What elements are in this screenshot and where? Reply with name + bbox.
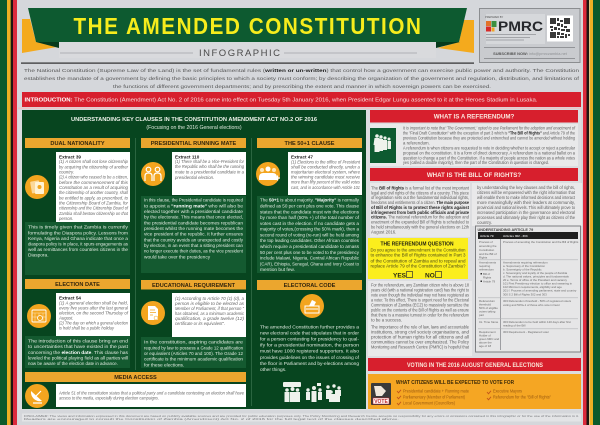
row: process: amending the — [479, 244, 497, 248]
panel heading: WHAT CITIZENS WILL BE EXPECTED TO VOTE FOR — [396, 380, 514, 386]
explanation: include Malawi, Nigeria, Central African Republic — [260, 256, 360, 262]
text: referendum voting: The importance of the rule of law, laws and accountable — [371, 324, 470, 330]
header: ELECTION DATE — [55, 282, 100, 288]
heading bar — [370, 110, 578, 122]
panel: what is a referendum — [370, 110, 578, 165]
icon: passport — [25, 175, 49, 199]
extract box: (2) A citizen who ceased to be a citizen, — [59, 175, 128, 180]
table header — [478, 232, 578, 239]
checklist: Executive Mayors — [493, 388, 522, 394]
table header: Article 79 — [480, 234, 494, 238]
panel: key clauses — [22, 110, 366, 409]
extract box — [56, 152, 130, 222]
logo panel: PMRC — [480, 8, 580, 62]
text column right: by understanding the key clauses and the bill of rights, — [477, 185, 575, 190]
explanation: to uncertainties that have existed in the past — [28, 344, 129, 350]
explanation: to appoint a "running mate" who will also be — [144, 203, 243, 209]
intro paragraph — [24, 68, 580, 90]
text column left: of legislation sets out the fundamental individual rights, — [371, 195, 469, 200]
explanation: (CAR), Ethiopia, Senegal, Ghana and Ivory Coast to — [260, 261, 359, 267]
right flag border — [583, 0, 600, 425]
introduction bar: INTRODUCTION: The Constitution (Amendment) Act No. 2 of 2016 came into effect on Tuesday 5th January 2016, when President Edgar Lungu assented to it at the Heroes Stadium in Lusaka. — [24, 98, 538, 104]
extract box: Zambia shall bestow citizenship on that — [58, 211, 129, 216]
icon: vote box — [371, 383, 391, 405]
explanation: required by law to possess a Grade 12 qualification — [144, 345, 243, 351]
clause: dual nationality — [25, 138, 130, 275]
clause: presidential running mate — [141, 138, 246, 273]
text column right: citizens will be empowered with the right information that — [477, 190, 576, 195]
row: threshold: 50% of eligible — [479, 306, 498, 310]
extract box: Extract 54 — [59, 296, 81, 300]
text: referendum voting: Commission of Zambia (ECZ) to massively sensitize the — [371, 302, 470, 308]
explanation: provides guidelines on the issues of crossing of — [260, 355, 360, 361]
row: threshold — [479, 299, 572, 317]
row: requirement: Holder of — [479, 334, 491, 338]
explanation: second round of voting (re-run) will be held among — [260, 232, 359, 238]
icon: ballot box — [300, 294, 324, 318]
text: referendum voting: For the referendum, any Zambian citizen who is above 18 — [371, 282, 470, 288]
extract box: the Republic who shall be the running — [175, 164, 245, 169]
text column right: more meaningfully with their leaders at community, — [477, 200, 575, 205]
table title: UNDERSTANDING ARTICLE 79 — [478, 228, 533, 232]
explanation: the floor in Parliament and by-elections among — [260, 361, 359, 367]
extract box: country. — [59, 170, 74, 174]
row: referendum amendments: requiring — [479, 264, 491, 268]
panel heading — [71, 117, 318, 131]
extract box: shall be conducted directly, under a — [291, 164, 361, 170]
extract box: certificate or its equivalent". — [175, 321, 225, 326]
extract box: (1) Elections to the office of President — [291, 160, 361, 164]
logo: PREPARED BY — [485, 15, 504, 19]
row: time frame: reading of the Bill — [503, 324, 526, 328]
intro paragraph: The National Constitution (Supreme Law of the Land) is the set of fundamental rules ( written or un-written ) that control how a government can exercise public power and authority. The Constitution — [24, 68, 579, 74]
explanation: for these elections. — [144, 362, 184, 368]
icon: document — [141, 301, 165, 325]
clause: the 50+1 clause — [256, 138, 362, 273]
definition text: yes (called a double majority), then the part of the Constitution in question is changed. — [403, 160, 549, 165]
extract box — [56, 384, 246, 407]
row: threshold: voters taking — [479, 310, 496, 314]
checklist: Presidential candidate + Running mate — [403, 388, 470, 394]
explanation: which require a presidential candidate to amass — [260, 244, 360, 250]
clause: election date — [25, 279, 130, 368]
row: requirement: 303 Requirement - Registered voter — [503, 330, 549, 334]
explanation — [141, 337, 246, 368]
left flag border — [0, 0, 17, 425]
logo: PMRC — [498, 19, 543, 34]
extract box: presidential election. — [174, 175, 214, 180]
text column left: of Bill of Rights is to protect these rights against — [371, 205, 470, 210]
subscribe line: SUBSCRIBE NOW: info@pmrczambia.net — [493, 51, 568, 56]
text column left — [371, 186, 470, 234]
row: referendum amendments: Amendments — [479, 260, 497, 264]
explanation: Kenya, Nigeria and Ghana indicate that once a — [28, 236, 128, 242]
extract box: the citizenship of another country, shall — [59, 190, 129, 195]
row: requirement: above the — [479, 340, 492, 344]
extract box: mate to a presidential candidate in a — [175, 170, 245, 174]
header: MEDIA ACCESS — [114, 375, 157, 381]
row: process: and the Bill of — [479, 252, 497, 256]
clause: media access — [25, 372, 246, 408]
explanation: well as remittances from countries citizens in the — [28, 247, 128, 253]
icon: calendar — [27, 304, 51, 328]
extract box: Extract 47 — [291, 154, 313, 160]
explanation: for a person contesting for presidency to qual- — [260, 337, 359, 343]
panel: what citizens will vote for — [368, 374, 581, 409]
intro paragraph: establishes the mandate of a government by defining the basic principles to which a society must conform; by describing the organization of the government and regulation, distribution, and limitations of — [24, 76, 580, 82]
explanation: no longer execute their duties, as the vice president — [144, 249, 244, 255]
text: referendum voting: to be a success. — [371, 318, 402, 322]
header: EDUCATIONAL REQUIREMENT — [152, 283, 236, 289]
extract box: be entitled to apply, as prescribed, to — [59, 195, 129, 200]
definition text: question to change a part of the Constitution. If a majority of people across the nation as a whole votes — [403, 156, 575, 160]
explanation: leveled the political playing field as all parties will — [28, 356, 128, 362]
explanation — [260, 325, 360, 373]
extract box: Extract 39 — [59, 154, 81, 160]
extract box: (1) A general election shall be held, — [59, 300, 128, 306]
text: referendum voting — [371, 282, 470, 350]
text column left: enactment of the expanded Bill of Rights is scheduled to — [371, 220, 470, 225]
checklist: Parliamentary (Member of Parliament) — [403, 394, 466, 400]
explanation: concerning the election date. This clause has — [28, 350, 129, 356]
explanation: majority of votes,(crossing the 50% mark), then a — [260, 227, 359, 233]
definition text — [403, 126, 576, 165]
callout: referendum question: of the Constitution of Zambia and to repeal and — [370, 258, 466, 263]
extract box — [172, 293, 246, 337]
text: referendum voting: public on the contents of the Bill of Rights as well as ensure — [371, 308, 470, 312]
panel: what is the bill of rights — [370, 168, 578, 234]
text column left: be held simultaneously with the general elections on 12th — [371, 224, 470, 230]
row: referendum amendments: Rights — [483, 276, 492, 280]
row: threshold: threshold — [479, 302, 491, 306]
header: THE 50+1 CLAUSE — [285, 141, 335, 147]
explanation: now be aware of the election date in advance. — [28, 361, 118, 367]
extract box: citizenship and the Citizenship Board of — [59, 206, 129, 211]
definition text: proposal on the constitution. It is a form of direct democracy. A referendum is a national ballot on a — [403, 150, 576, 156]
row: referendum amendments: Article 79 — [483, 280, 495, 284]
footer disclaimer: Readers are encouraged to consult the Constitution of Zambia (Amendment) Act No. 2 of 2016 for the full legal text of the clauses described above. — [24, 418, 400, 421]
row: referendum amendments: 300 S 2 Bill of Rights 302 and 303 — [503, 292, 547, 296]
text column left: citizens. The national referendum for the adoption and — [371, 215, 470, 220]
explanation: The amended Constitution further provides a — [260, 325, 359, 331]
extract box: Member of Parliament, if that person " — [175, 306, 244, 311]
text column left: freedoms and entitlements of a citizen. The main purpose — [371, 200, 470, 205]
text column left: infringement from both public officials and private — [371, 210, 470, 215]
text column left: legal and civil rights of the citizens of a country. This piece — [371, 190, 470, 195]
explanation: defined as 50 per cent plus one vote. This clause — [260, 204, 359, 210]
extract box: (1) A citizen shall not lose citizenship — [59, 159, 129, 164]
row: time frame: Int. Time frame — [479, 320, 499, 324]
clause: educational requirement — [141, 280, 246, 368]
icon: satellite dish — [25, 384, 49, 408]
callout: referendum question: Do you agree to the amendment to the Constitution — [370, 248, 466, 252]
explanation — [25, 336, 130, 368]
table header: Articles 302 - 303 — [503, 234, 528, 238]
explanation: votes cast in the election. If no candidate gets a — [260, 221, 359, 227]
callout: referendum question — [368, 238, 468, 280]
text: referendum voting: a voter. To this effect, There is urgent need for the Electoral — [371, 298, 469, 302]
row: time frame: 303 Referendum to be held within 120 days after first — [503, 320, 571, 324]
row: threshold: 303 Referendum threshold - 50% of registered voters — [503, 299, 572, 303]
extract box: has obtained, as a minimum academic — [175, 311, 245, 316]
extract box: Article 51 of the constitution states that a political party and a candidate contesting an election shall have — [58, 390, 245, 396]
definition text: previous Constitution because they are protected and entrenched and cannot be amended without holding — [403, 136, 576, 140]
panel heading: UNDERSTANDING KEY CLAUSES IN THE CONSTITUTION AMENDMENT ACT NO.2 OF 2016 — [71, 117, 318, 123]
intro paragraph: the functions of different government departments; and by prescribing the extent and manner in which sovereign powers can be exercised. — [113, 84, 491, 90]
extract box: the Citizenship Board of Zambia, for — [59, 200, 129, 206]
explanation: other things. — [260, 367, 286, 373]
heading bar: WHAT IS THE BILL OF RIGHTS? — [427, 172, 521, 179]
header: ELECTORAL CODE — [284, 283, 336, 289]
explanation: the top leading candidates. Other African countries — [260, 238, 360, 244]
subtitle: INFOGRAPHIC — [199, 48, 280, 59]
row: time frame — [479, 320, 571, 328]
explanation: vice president of the republic. It further ensures — [144, 232, 244, 238]
explanation: formulating the Diaspora policy. Lessons from — [28, 230, 128, 236]
explanation: new electoral code that stipulates that in order — [260, 331, 359, 337]
heading bar: WHAT IS A REFERENDUM? — [434, 114, 514, 121]
checklist: Local Government (Councillors) — [403, 400, 456, 406]
row: referendum amendments: 20 e. Terms of office of the President and vacancy — [503, 278, 568, 282]
checklist — [397, 388, 551, 406]
definition text: the "Final Draft Constitution" with the exception of part 3 which is "The Bill of Rights" and Article 79 of the — [403, 130, 576, 136]
extract box: majoritarian electoral system, where — [291, 170, 361, 174]
row: referendum amendments: c. Sovereignty and loyalty of the people of Zambia — [503, 271, 568, 275]
explanation: In the constitution, aspiring candidates are — [144, 340, 243, 346]
yes no options: NO — [425, 272, 435, 280]
extract box: by acquiring the citizenship of another — [59, 164, 129, 169]
text: referendum voting: vote even though the individual may not have registered as — [371, 292, 469, 298]
callout: referendum question: to enhance the Bill of Rights contained in Part 3 — [370, 253, 466, 258]
table: understanding article 79 — [476, 226, 580, 352]
text column right: increased participation in the governance and electoral — [477, 210, 575, 215]
text: referendum voting: Monitoring and Research Centre (PMRC) is hopeful that — [371, 344, 470, 350]
icon: two people — [141, 162, 165, 186]
row: process: Process of amending the Constitution and the Bill of Rights — [503, 240, 579, 244]
explanation: diaspora policy is in place, it spurs engagements as — [28, 242, 129, 248]
banner: voting in the 2016 elections — [368, 358, 581, 371]
text: referendum voting: institutions, strong civil society organisations, and — [371, 330, 470, 334]
explanation: would take over the presidency — [144, 254, 211, 260]
explanation: by more than half (50% +) of the total number of — [260, 215, 360, 221]
title: THE AMENDED CONSTITUTION — [74, 13, 422, 39]
row: requirement: Requirement — [479, 330, 496, 334]
explanation: The introduction of this clause bring an end — [28, 338, 128, 344]
introduction bar — [22, 92, 581, 107]
extract box: access to the media, especially during election campaigns. — [59, 396, 159, 401]
row: process: Rights — [479, 256, 488, 260]
extract box: person. — [58, 216, 73, 221]
row: threshold: voting and 50%+1 of those who vote in favor — [503, 303, 560, 307]
text column left: The Bill of Rights is a formal list of the most important — [371, 186, 470, 190]
extract box: August. — [58, 316, 74, 320]
explanation: president whilst the running mate becomes the — [144, 226, 243, 232]
row: referendum amendments: a. Supremacy of the Constitution — [503, 264, 545, 268]
footer disclaimer: DISCLAIMER: The views and information expressed in this document are based on publicly available sources and are provided for public education purposes only. The Policy Monitoring and Research Centre accepts no responsibility for any errors or omissions contained in this infographic or for the use of the information in it. — [24, 415, 580, 418]
explanation: that the country avoids an unexpected and costly — [144, 237, 244, 243]
definition text: It is important to note that 'The Government,' opted to use Parliament for the adoption and enactment of — [403, 126, 576, 130]
extract box: every five years after the last general — [59, 306, 129, 310]
text column right: processes and ultimately play their right as citizens of the — [477, 215, 576, 220]
text column right: country. — [477, 220, 492, 225]
row: referendum amendments: 101 First Presidency election to office and swearing in — [503, 282, 572, 286]
explanation: the presidential candidate becomes republican — [144, 220, 243, 226]
row: requirement: age of 18 — [479, 344, 491, 348]
text: referendum voting: communities cannot be over emphasized. The Policy — [371, 340, 470, 344]
text column right: will enable them to make informed decisions and interact — [477, 195, 576, 200]
explanation: or equivalent (Articles 70 and 100). The Grade 12 — [144, 351, 243, 357]
callout title: THE REFERENDUM QUESTION — [380, 242, 454, 248]
explanation: 50 per cent plus one to be voted to the presidency — [260, 250, 360, 256]
extract box — [172, 152, 246, 195]
extract box: person is eligible to be elected as — [174, 301, 245, 306]
header: PRESIDENTIAL RUNNING MATE — [151, 141, 237, 147]
icon: group plus — [256, 162, 280, 186]
explanation — [257, 196, 362, 273]
text: referendum voting: that there is a massive turnout in order for the referendum — [371, 312, 469, 318]
icon: supporters — [283, 382, 341, 402]
heading bar — [370, 168, 578, 181]
extract box: more than fifty percent of the valid votes — [291, 180, 361, 185]
row: referendum amendments: b. Sovereignty of the Republic — [503, 268, 542, 272]
extract box: Constitution as a result of acquiring — [59, 185, 129, 190]
extract box: cast, and in accordance with Article 101 — [291, 185, 361, 190]
text column right: provincial and national levels. This will ultimately prove to — [477, 205, 576, 210]
explanation: certificate is the minimum academic qualification — [144, 357, 243, 363]
row: threshold: Referendum — [479, 299, 495, 303]
text column right — [477, 185, 576, 225]
text: referendum voting: years old (with a national registration card) has the right to — [371, 288, 470, 292]
extract box: (2) The day on which a general election — [59, 320, 129, 326]
explanation: This is timely given that Zambia is currently — [28, 225, 129, 231]
definition text: A referendum is when citizens are requested to vote in deciding whether to accept or reject a particular — [403, 146, 575, 150]
explanation: states that the candidate must win the elections — [260, 209, 360, 215]
row: process: Process of — [479, 240, 493, 244]
row: referendum amendments: 201 f. Process of amending parliament, state and country — [503, 288, 577, 292]
explanation — [25, 222, 130, 275]
row: referendum amendments: referendum — [479, 268, 494, 272]
explanation: elected together with a presidential candidate — [144, 209, 243, 215]
explanation: The 50+1 is about majority. "Majority" is normally — [260, 198, 360, 204]
clause: electoral code — [257, 280, 362, 402]
row: referendum amendments: 102 Minimum requirements, eligibility and age — [503, 285, 562, 289]
banner: voting in the 2016 elections: VOTING IN THE 2016 AUGUST GENERAL ELECTIONS — [407, 362, 543, 369]
row: referendum amendments — [479, 260, 577, 296]
extract box: is held shall be a public holiday — [59, 326, 115, 330]
extract box: (1) There shall be a Vice-President for — [175, 159, 245, 164]
yes no options: YES — [393, 272, 407, 280]
explanation: ify for a presidential nomination, the person — [260, 343, 359, 349]
extract box — [56, 293, 130, 336]
extract box: qualification, a grade twelve (12) — [175, 316, 245, 321]
extract box: (1) According to Article 70 (1) (d), a — [175, 296, 245, 301]
explanation: mention but few. — [260, 267, 295, 273]
explanation — [141, 196, 246, 273]
row: referendum amendments: d. The national values, principles and fundamentals — [503, 274, 569, 278]
explanation: In this clause, the Presidential candidate is required — [144, 198, 243, 204]
explanation: by election, in an event that a sitting president can — [144, 243, 243, 249]
background map shape — [368, 124, 582, 356]
icon: queue of voters — [370, 128, 396, 163]
explanation: by the electorate. This means that once elected, — [144, 215, 243, 221]
footer disclaimer — [22, 414, 581, 422]
title banner — [22, 8, 474, 58]
row: requirement — [479, 330, 549, 348]
extract box: election, on the second Thursday of — [59, 310, 129, 316]
yes no options — [393, 272, 442, 280]
extract box: Extract 110 — [175, 154, 200, 160]
header: DUAL NATIONALITY — [50, 141, 105, 147]
explanation: must have 1000 registered supporters. It also — [260, 349, 359, 355]
row: process: Constitution — [479, 248, 495, 252]
logo — [485, 14, 545, 44]
row: referendum amendments: Amendments requiring referendum — [503, 260, 548, 264]
text column left: August 2016. — [371, 229, 396, 234]
row: referendum amendments: Bill of — [483, 272, 490, 276]
row: process — [479, 240, 579, 260]
explanation: Diaspora. — [28, 253, 49, 259]
QR code — [547, 16, 573, 42]
icon: vote box: VOTE — [374, 399, 388, 405]
extract box — [288, 152, 362, 195]
row: threshold: part — [479, 313, 484, 317]
row: requirement: green NRC and — [479, 337, 499, 341]
extract box: the winning candidate must receive — [291, 174, 361, 180]
definition text: a referendum. — [403, 140, 430, 146]
extract box: before the commencement of this — [59, 180, 129, 185]
text: referendum voting: protection of human rights for all citizens and all — [371, 334, 469, 340]
checklist: Referendum for the "Bill of Rights" — [493, 394, 551, 400]
panel heading: (Focusing on the 2016 General elections) — [146, 125, 242, 131]
callout: referendum question: replace Article 79 of the Constitution of Zambia? — [370, 264, 466, 268]
